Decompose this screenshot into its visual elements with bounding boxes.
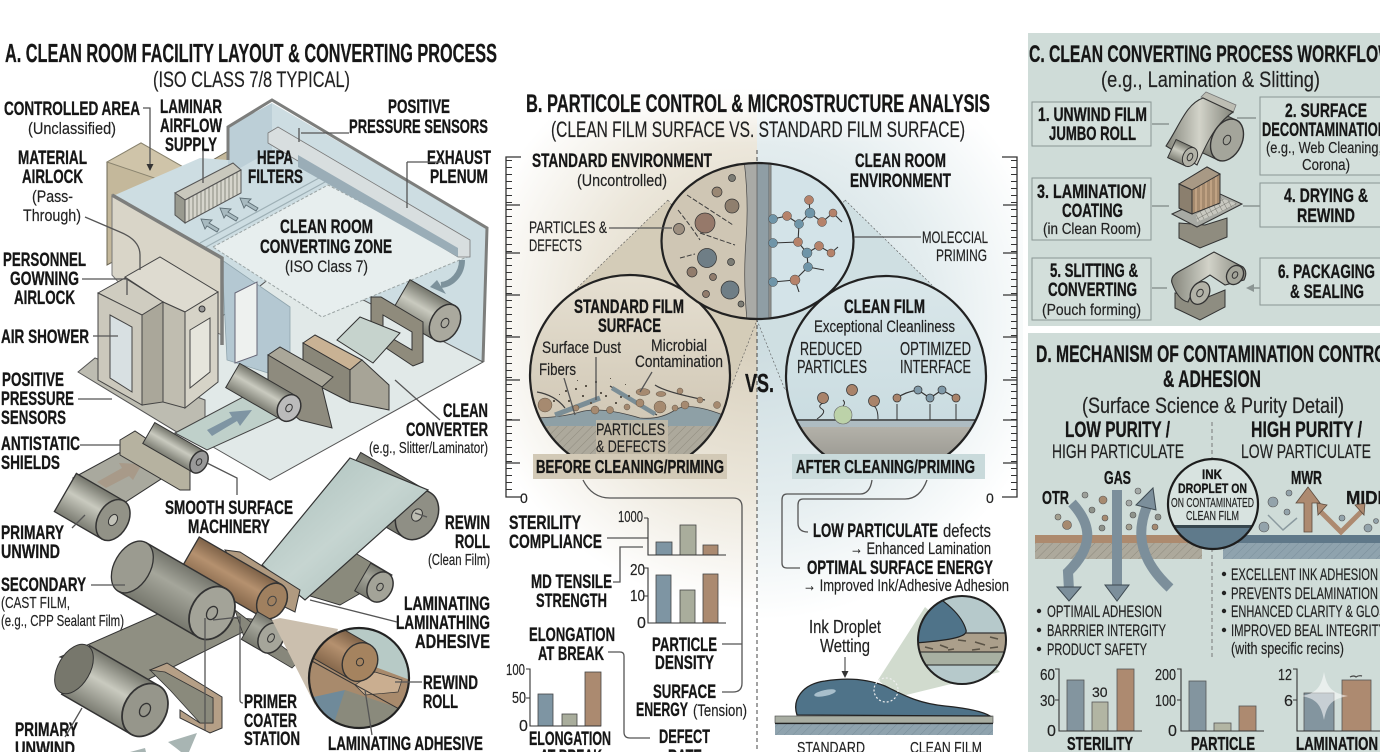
labels A: (Unclassified) (28, 119, 116, 138)
step 1 (1032, 102, 1151, 146)
step 5 (1032, 258, 1151, 320)
left bullet list: OPTIMAIL ADHESION (1047, 602, 1162, 621)
magnifier cones (575, 200, 937, 390)
step boxes (1032, 97, 1380, 320)
step 1: JUMBO ROLL (1049, 124, 1136, 145)
tensile chart (630, 562, 726, 632)
labels B: Contamination (635, 352, 723, 371)
labels A: SENSORS (1, 408, 66, 429)
label box: after cleaning (792, 454, 985, 479)
top magnified circle (662, 160, 857, 322)
labels A: LAMINATING (404, 594, 490, 615)
chart labels: ENERGY (636, 700, 688, 721)
labels A: AIRLOCK (22, 167, 83, 188)
labels A: LAMINATHING (396, 613, 490, 634)
labels A: PRESSURE (1, 389, 74, 410)
labels B: Surface Dust (542, 338, 621, 357)
sterility chart: 1000 (618, 509, 643, 526)
lamination chart D: 12 (1278, 667, 1292, 684)
labels A: ROLL (423, 692, 458, 713)
sterility chart D: 30 (1040, 693, 1055, 710)
label box: before cleaning: PARTICLES (596, 420, 665, 439)
ink droplet circle: INK (1202, 466, 1222, 482)
label box: before cleaning (533, 420, 727, 479)
labels A: HEPA (257, 148, 293, 169)
ink droplet circle: ON CONTAMINATED (1171, 495, 1254, 510)
panel D: mechanism (1028, 333, 1380, 752)
icon: slitting rollers (1172, 252, 1247, 320)
elongation chart: 50 (512, 690, 526, 707)
benefit text B: → Improved Ink/Adhesive Adhesion (803, 576, 1009, 595)
labels A: CONVERTING ZONE (260, 237, 392, 258)
labels A: FILTERS (248, 167, 303, 188)
chart labels: AT BREAK (538, 644, 604, 665)
labels B: ENVIRONMENT (850, 171, 951, 192)
chart labels: PARTICLE (652, 635, 717, 656)
labels A: PRIMARY (1, 523, 64, 544)
chart labels: SURFACE (653, 682, 716, 703)
label box: before cleaning: BEFORE CLEANING/PRIMING (536, 457, 724, 477)
labels B: STANDARD FILM (574, 297, 684, 318)
leader lines A (65, 108, 441, 737)
scale rulers: 0 (986, 490, 994, 506)
scale rulers: 0 (520, 490, 528, 506)
labels A: MATERIAL (18, 148, 87, 169)
labels B: PRIMING (936, 246, 987, 265)
chart labels: DEFECT (659, 727, 710, 748)
film cross sections (1035, 535, 1380, 559)
chart labels: (Tension) (693, 701, 747, 720)
nip zoom magnifier (272, 618, 410, 730)
labels B: SURFACE (598, 316, 661, 337)
divider (1212, 422, 1213, 657)
step 2: Corona) (1302, 157, 1350, 174)
sterility chart D (1040, 667, 1142, 752)
labels A: ADHESIVE (415, 632, 490, 653)
labels B: OPTIMIZED (900, 339, 971, 359)
labels A: POSITIVE (2, 370, 64, 391)
heading C (1029, 41, 1380, 92)
particles (1055, 488, 1378, 532)
labels B: PARTICLES & (529, 218, 607, 237)
tensile chart: 10 (630, 588, 645, 605)
chart labels: STRENGTH (536, 591, 607, 612)
step 2 (1260, 97, 1380, 175)
labels A: UNWIND (1, 542, 60, 563)
labels A: REWIN (445, 513, 490, 534)
heading A: A. CLEAN ROOM FACILITY LAYOUT & CONVERTING PROCESS (5, 38, 497, 68)
left bullet list: BARRRIER INTERGITY (1047, 621, 1166, 640)
labels A: CONTROLLED AREA (4, 99, 140, 120)
labels A: EXHAUST (427, 148, 491, 169)
labels B: STANDARD ENVIRONMENT (532, 151, 712, 172)
icon: coating station (1172, 167, 1242, 248)
step 4 (1260, 183, 1380, 227)
label box: before cleaning: & DEFECTS (596, 437, 666, 456)
laminating line illustration (46, 452, 447, 752)
labels A: (ISO Class 7) (285, 257, 368, 276)
labels B: REDUCED (800, 339, 862, 359)
labels A: POSITIVE (388, 97, 450, 118)
column headings: HIGH PARTICULATE (1052, 442, 1184, 463)
labels A: SMOOTH SURFACE (165, 498, 293, 519)
labels A: AIRLOCK (14, 288, 75, 309)
ink droplet wetting illustration (775, 590, 1010, 752)
labels A: (CAST FILM, (1, 595, 70, 612)
step 1: 1. UNWIND FILM (1038, 105, 1147, 126)
label box: after cleaning: AFTER CLEANING/PRIMING (796, 457, 975, 477)
labels A: AIR SHOWER (1, 327, 89, 348)
labels B: MOLECCIAL (922, 228, 988, 247)
labels A: PRESSURE SENSORS (349, 117, 488, 138)
sparkle watermark (1302, 672, 1348, 720)
labels A: ROLL (455, 532, 490, 553)
left bullet list (1036, 605, 1166, 656)
heading D (1036, 341, 1380, 418)
labels A: CONVERTER (406, 420, 488, 441)
elongation chart: 0 (519, 718, 528, 735)
heading C: (e.g., Lamination & Slitting) (1101, 67, 1320, 92)
labels B: VS. (745, 368, 774, 398)
elongation chart: 100 (506, 662, 525, 679)
labels B: Fibers (539, 360, 576, 379)
heading A (5, 38, 497, 92)
step 5: CONVERTING (1048, 280, 1137, 301)
panel B background (503, 88, 1023, 752)
heading D: & ADHESION (1163, 366, 1261, 393)
particle chart D: 200 (1155, 667, 1176, 684)
sterility chart D: 30 (1092, 684, 1108, 700)
particle chart D: 0 (1168, 723, 1177, 740)
benefit text B: OPTIMAL SURFACE ENERGY (807, 558, 993, 579)
arrow labels: OTR (1042, 488, 1069, 508)
chart labels: MD TENSILE (531, 572, 612, 593)
labels A: STATION (244, 729, 300, 750)
step 5: 5. SLITTING & (1050, 261, 1138, 282)
labels A: Through) (23, 206, 81, 225)
labels B: Microbial (651, 336, 707, 355)
right bullet list: (with specific recins) (1231, 639, 1344, 658)
arrow labels: GAS (1104, 468, 1131, 488)
panel C: process workflow (1028, 33, 1380, 326)
sterility chart D: 0 (1047, 723, 1056, 740)
ink droplet wetting illustration: Wetting (820, 636, 870, 656)
particle chart D: 100 (1155, 693, 1176, 710)
heading A: (ISO CLASS 7/8 TYPICAL) (153, 67, 350, 92)
labels A: (e.g., Slitter/Laminator) (369, 440, 488, 457)
ink droplet circle: CLEAN FILM (1186, 508, 1239, 523)
chart labels: COMPLIANCE (509, 532, 602, 553)
step 3: 3. LAMINATION/ (1037, 182, 1147, 203)
left film circle (530, 275, 735, 481)
heading B (526, 90, 990, 142)
benefit text B: LOW PARTICULATE (813, 521, 938, 542)
labels A: REWIND (423, 673, 478, 694)
sterility chart (618, 509, 726, 555)
labels A: PERSONNEL (3, 250, 86, 271)
panel A: clean room facility layout (1, 38, 497, 752)
workflow arrows (1152, 118, 1260, 288)
tensile chart: 20 (630, 562, 645, 579)
labels A (1, 97, 491, 752)
ink droplet wetting illustration: Ink Droplet (809, 617, 881, 637)
connector lines B (583, 480, 927, 738)
labels A: PRIMER (244, 692, 297, 713)
particle chart D (1155, 667, 1264, 752)
step 3: COATING (1062, 201, 1123, 222)
ink droplet circle: DROPLET ON (1178, 480, 1247, 496)
labels A: (e.g., CPP Sealant Film) (1, 613, 124, 630)
benefit text B (803, 521, 1009, 595)
labels A: LAMINAR (160, 97, 222, 118)
step 3: (in Clean Room) (1043, 221, 1141, 238)
labels A: AIRFLOW (160, 116, 222, 137)
bar charts B (506, 509, 747, 752)
chart labels: ELONGATION (529, 729, 611, 750)
icon: film roll (1166, 92, 1250, 169)
left bullet list: PRODUCT SAFETY (1047, 640, 1147, 659)
chart labels: STERILITY (509, 513, 581, 534)
labels A: PRIMARY (15, 720, 78, 741)
labels A: (Clean Film) (428, 552, 490, 569)
labels A: SUPPLY (165, 135, 217, 156)
labels A: CLEAN ROOM (280, 217, 373, 238)
labels B: CLEAN ROOM (855, 151, 946, 172)
lamination chart D: 6 (1284, 693, 1293, 710)
step 4: REWIND (1297, 206, 1355, 227)
step 3 (1032, 178, 1151, 240)
centre divider (756, 150, 758, 752)
labels B: Exceptional Cleanliness (814, 317, 955, 336)
step 6 (1260, 258, 1380, 305)
column headings: LOW PURITY / (1065, 417, 1170, 442)
lamination chart D (1278, 667, 1380, 752)
labels B: (Uncontrolled) (577, 171, 667, 190)
panel B: particle control (503, 88, 1023, 752)
labels A: GOWNING (10, 269, 79, 290)
labels B: CLEAN FILM (844, 297, 925, 318)
elongation chart (506, 662, 601, 735)
column headings (1053, 420, 1370, 458)
arrow labels: MWR (1291, 468, 1322, 488)
labels A: (Pass- (32, 187, 73, 206)
labels B (529, 151, 988, 415)
arrow labels (1042, 470, 1380, 504)
benefit text B: defects (943, 521, 991, 541)
right film circle (785, 276, 990, 482)
chart labels: DENSITY (655, 653, 714, 674)
labels A: ANTISTATIC (1, 434, 80, 455)
labels B: PARTICLES (797, 357, 867, 377)
heading B: (CLEAN FILM SURFACE VS. STANDARD FILM SURFACE) (551, 117, 965, 142)
chart labels: ELONGATION (529, 625, 615, 646)
labels A: CLEAN (443, 401, 488, 422)
benefit text B: → Enhanced Lamination (850, 539, 991, 558)
chart labels (509, 513, 747, 752)
right bullet list (1222, 565, 1380, 658)
step 5: (Pouch forming) (1042, 302, 1141, 319)
labels B: DEFECTS (529, 236, 582, 255)
labels A: SHIELDS (1, 453, 60, 474)
heading B: B. PARTICOLE CONTROL & MICROSTRUCTURE ANALYSIS (526, 90, 990, 118)
sterility chart D: 60 (1040, 667, 1055, 684)
labels A: PLENUM (430, 167, 488, 188)
tensile chart: 0 (637, 615, 646, 632)
scale rulers (506, 157, 1017, 506)
labels B: INTERFACE (900, 357, 971, 377)
permeation arrows (1057, 487, 1365, 601)
labels A: SECONDARY (1, 575, 86, 596)
labels A: COATER (244, 711, 297, 732)
labels A: MACHINERY (188, 517, 270, 538)
isometric clean room illustration (54, 100, 487, 547)
ink droplet circle (1165, 459, 1261, 555)
